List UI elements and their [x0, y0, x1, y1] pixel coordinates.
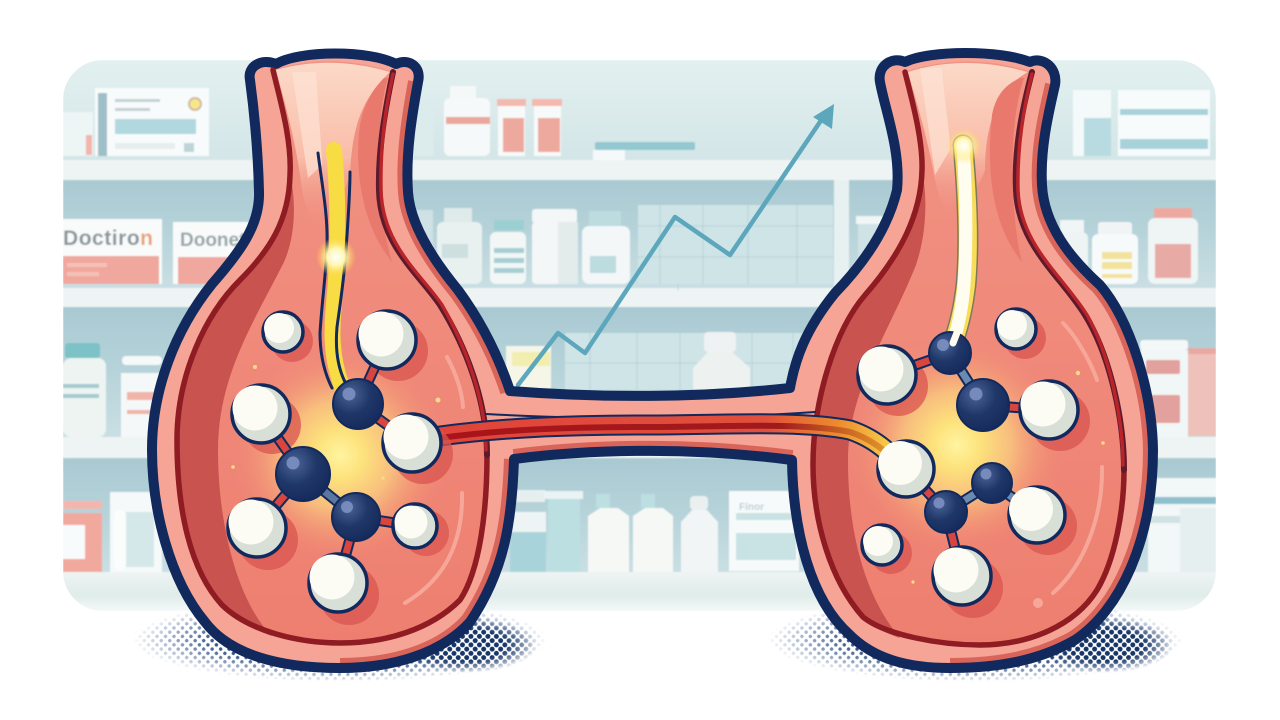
third shelf items center: [506, 332, 833, 390]
connected flask body: [152, 53, 1153, 668]
bottom shelf items right: [1148, 478, 1216, 572]
right neck line left flask: [379, 72, 487, 455]
bonds left: [257, 340, 415, 583]
shelf upright post: [834, 180, 849, 288]
halftone shadow left: [136, 611, 544, 680]
bond colour right: [887, 353, 1049, 576]
second shelf product boxes: Doonet: [180, 230, 246, 251]
chart grid panel upper: [638, 205, 833, 290]
bottom shelf items left: [63, 492, 162, 572]
carbon atoms left: [276, 379, 383, 541]
red wall line left flask: [177, 70, 487, 643]
right neck red core right flask: [1018, 74, 1123, 465]
left yellow duct: [316, 150, 356, 392]
highlight strokes right: [1033, 323, 1102, 608]
right neck red core left flask: [381, 74, 486, 450]
right flask cavity: [813, 62, 1124, 645]
bottom shelf bottles center: Fínor: [739, 502, 764, 513]
hydrogen highlights right: [858, 310, 1066, 592]
third shelf items right: [1140, 340, 1216, 437]
atom shadows right: [868, 317, 1090, 618]
slate bond left: [303, 474, 356, 517]
hydrogen highlights left: [228, 312, 428, 600]
third shelf items left: [63, 342, 163, 438]
carbon highlights left: [286, 388, 356, 513]
top shelf jars center: [412, 86, 695, 160]
second shelf bottles right: [856, 208, 1198, 284]
bond colour left: [257, 340, 415, 583]
pharmacy shelf background: [63, 60, 1216, 611]
bottom shelf bottles center: [510, 490, 799, 572]
left molecule: [228, 311, 453, 625]
bonds right: [887, 353, 1049, 576]
second shelf bottles center: [413, 208, 630, 284]
top shelf boxes right: [1073, 90, 1210, 156]
right molecule: [858, 309, 1090, 618]
slate bonds right: [946, 353, 1037, 515]
halftone shadow right: [770, 610, 1180, 680]
sparkles left: [231, 365, 440, 480]
atom shadows left: [238, 320, 453, 625]
duct overlap on carbon: [953, 330, 958, 343]
carbon atoms right: [925, 332, 1012, 533]
second shelf product boxes: [63, 219, 253, 284]
hydrogen atoms right: [858, 309, 1078, 605]
red wall line right flask: [813, 72, 1124, 645]
carbon highlights right: [934, 339, 992, 508]
top shelf boxes left: [63, 88, 209, 156]
sparkles right: [911, 371, 1105, 584]
right glowing duct: [946, 128, 982, 345]
rising trend arrow: [518, 104, 834, 385]
infographic illustration: [63, 48, 1216, 680]
second shelf product boxes: Doctiron: [63, 227, 153, 250]
bridge tube: [440, 412, 892, 458]
right neck line right flask: [1016, 72, 1124, 470]
hydrogen atoms left: [228, 311, 441, 612]
left flask cavity: [177, 61, 487, 643]
highlight strokes left: [405, 357, 463, 603]
